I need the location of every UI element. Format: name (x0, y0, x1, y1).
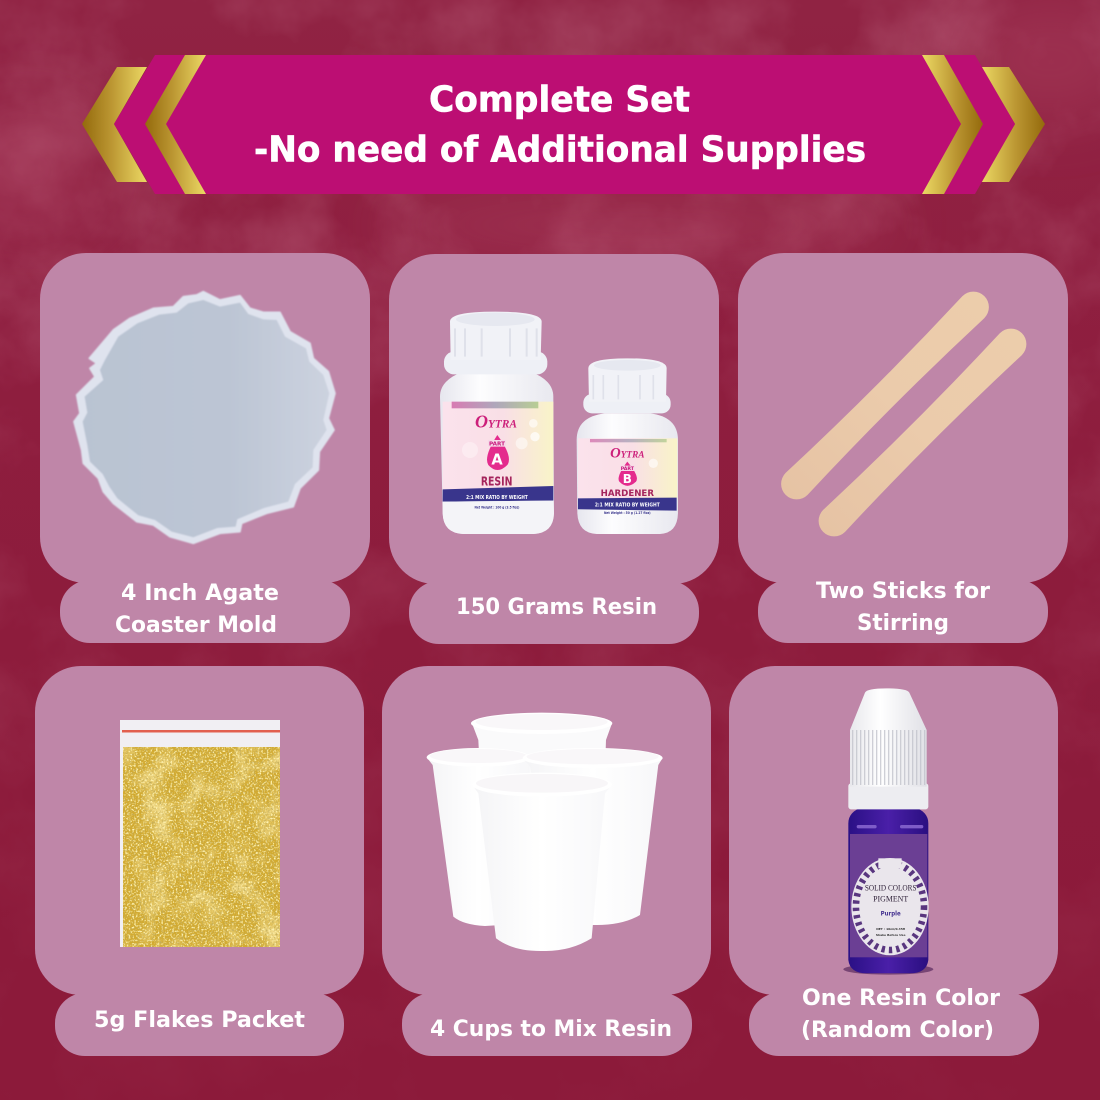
panel: coaster mold (40, 253, 370, 643)
icon: left inner gold chevron (145, 55, 206, 194)
icon: right outer gold chevron (981, 67, 1045, 182)
bottle B: B (623, 472, 632, 486)
bottle B: Net Weight : 50 g (1.27 floz) (604, 511, 651, 515)
panel: mixing cups (382, 666, 711, 1056)
label: resin color (801, 986, 1000, 1043)
bottle A: PART (489, 441, 505, 447)
bottle A: OYTRA (475, 411, 517, 431)
icon: purple pigment bottle: Purple (881, 911, 901, 918)
title: Complete Set (429, 80, 690, 120)
panel: stirring sticks (738, 253, 1068, 643)
label: coaster mold (115, 581, 279, 638)
icon: purple pigment bottle (843, 688, 933, 975)
bottle B: 2:1 MIX RATIO BY WEIGHT (595, 502, 660, 508)
icon: purple pigment bottle: Shake Before Use (876, 933, 905, 937)
label: coaster mold: Coaster Mold (115, 613, 277, 638)
icon: resin and hardener bottles (440, 312, 678, 534)
left cup (427, 748, 530, 926)
bottle A: RESIN (481, 474, 512, 489)
label: sticks: Stirring (857, 611, 949, 636)
banner: title ribbon (82, 55, 1045, 194)
icon: gold flakes packet (120, 720, 280, 947)
label: cups: 4 Cups to Mix Resin (430, 1017, 672, 1042)
label: resin: 150 Grams Resin (456, 595, 657, 620)
label: resin color: One Resin Color (802, 986, 1000, 1011)
icon: four paper cups (427, 713, 663, 951)
title: -No need of Additional Supplies (254, 130, 866, 170)
panel: resin color (729, 666, 1058, 1056)
bottle A (440, 312, 554, 534)
bottle A: Net Weight : 100 g (3.5 floz) (474, 505, 520, 509)
right cup (523, 748, 663, 925)
label: coaster mold: 4 Inch Agate (121, 581, 279, 606)
bottle A: 2:1 MIX RATIO BY WEIGHT (466, 495, 528, 501)
label: sticks (816, 579, 990, 636)
bottle B (577, 358, 678, 534)
icon: left outer gold chevron (82, 67, 147, 182)
back cup (471, 713, 612, 773)
icon: purple pigment bottle: PIGMENT (873, 895, 908, 904)
ribbon shape (114, 55, 1015, 194)
bottle A: A (491, 451, 503, 468)
panel: resin bottles (389, 254, 719, 644)
bottle B: OYTRA (610, 445, 645, 461)
bottle B: PART (621, 466, 635, 472)
label: sticks: Two Sticks for (816, 579, 990, 604)
label: resin color: (Random Color) (801, 1018, 994, 1043)
title (254, 80, 866, 170)
front cup (472, 773, 612, 951)
panel: flakes packet (35, 666, 364, 1056)
bottle B: HARDENER (601, 489, 654, 499)
icon: purple pigment bottle: NET : 10ml/0.35fl (876, 927, 905, 931)
icon: agate coaster mold (74, 292, 335, 543)
icon: two wooden sticks (775, 285, 1033, 543)
icon: purple pigment bottle: SOLID COLORS (865, 884, 916, 893)
icon: right inner gold chevron (922, 55, 983, 194)
label: flakes: 5g Flakes Packet (94, 1008, 305, 1033)
